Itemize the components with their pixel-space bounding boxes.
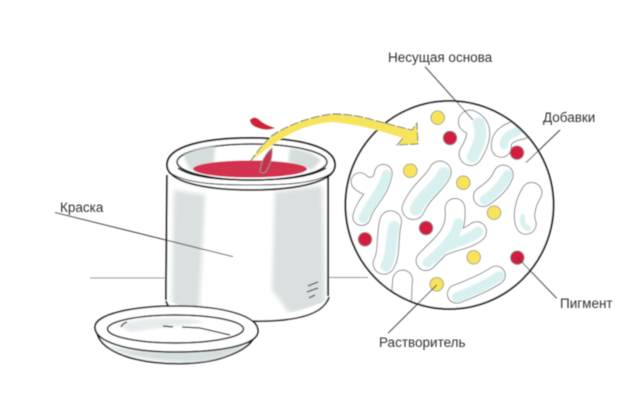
can rim [167,138,335,190]
can body [166,175,329,321]
label: carrier base: Несущая основа [388,50,493,65]
infographic: composition of paint [54,52,613,366]
label: additives: Добавки [543,110,595,125]
carrier blobs [360,122,532,310]
magnified circle [346,101,554,310]
leader lines [55,67,560,333]
paint drip [260,148,272,173]
blob fill [360,122,532,310]
paint can [166,138,335,321]
blob outlines [360,122,532,310]
blob shading [363,123,528,297]
label: pigment: Пигмент [560,296,613,311]
yellow arrow [250,114,418,162]
paint surface [193,160,307,178]
label: solvent: Растворитель [379,335,466,350]
paint drop above can [250,118,275,130]
pigment dots [358,131,524,264]
lid [95,306,258,364]
label: paint: Краска [60,200,104,215]
ground line [90,276,368,279]
solvent dots [404,111,501,291]
